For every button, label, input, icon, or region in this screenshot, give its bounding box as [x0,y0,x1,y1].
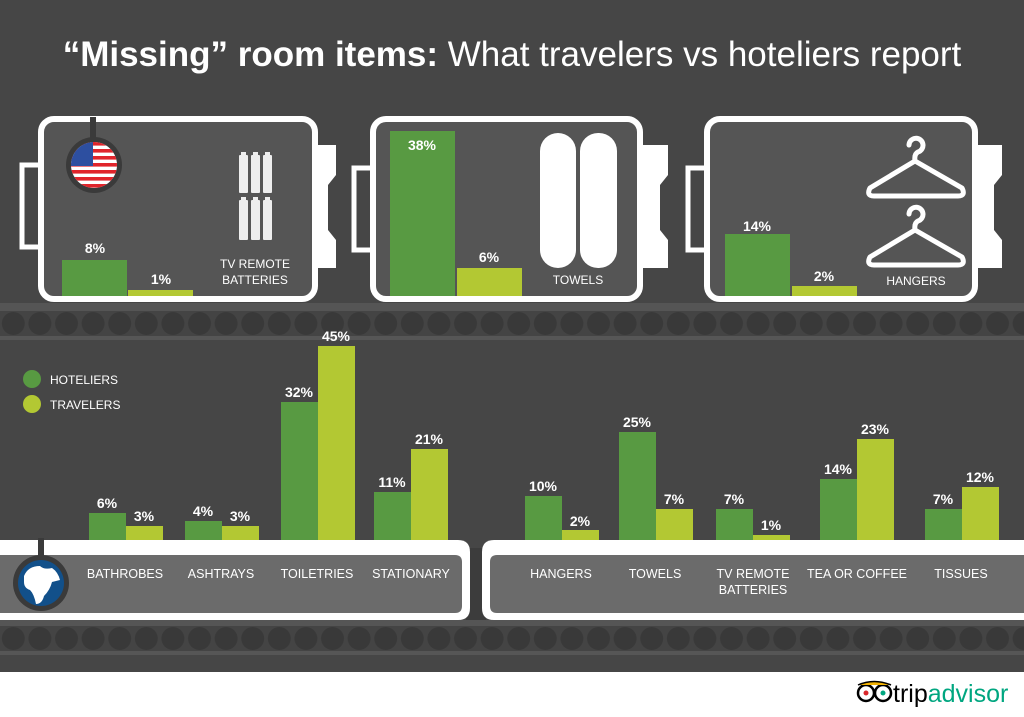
title: “Missing” room items: What travelers vs hoteliers report [63,35,962,74]
bar: travelers 6% [457,268,522,296]
category labels: BATHROBES [87,567,163,581]
panel: towels [354,119,668,299]
bar chart: global: 3% [230,508,251,524]
bar chart: global: 14% [824,461,853,477]
bottom conveyor belt [0,620,1024,655]
panel: US tv remote batteries [22,117,336,299]
bar: hoteliers 14% [725,234,790,296]
panel: hangers: HANGERS [886,274,946,288]
bar chart: global: 4% [193,503,214,519]
bar: hoteliers 38% [390,131,455,296]
bar: hoteliers 8% [62,260,127,296]
bar chart: global: 11% [378,474,406,490]
panel: US tv remote batteries: TV REMOTE [220,257,290,271]
category labels: TOILETRIES [281,567,353,581]
panel: US tv remote batteries: 8% [85,240,106,256]
bar chart: global: 7% [933,491,954,507]
bar chart: global: 25% [623,414,652,430]
category labels: HANGERS [530,567,592,581]
icon: US flag [66,117,122,193]
panel: towels: 6% [479,249,500,265]
panel: hangers [688,119,1002,299]
category labels: BATTERIES [719,583,787,597]
category labels: ASHTRAYS [188,567,254,581]
legend [23,370,120,413]
left tray [0,540,486,622]
legend: TRAVELERS [50,398,120,412]
panel: US tv remote batteries: 1% [151,271,172,287]
bar: travelers 2% [792,286,857,296]
panel: hangers: 2% [814,268,835,284]
icon: towels [540,133,617,268]
panel: hangers: 14% [743,218,772,234]
bar chart: global [89,328,999,540]
bar chart: global: 32% [285,384,314,400]
category labels: STATIONARY [372,567,451,581]
bar chart: global: 21% [415,431,444,447]
bar chart: global: 2% [570,513,591,529]
category labels: TV REMOTE [717,567,789,581]
bar: travelers 1% [128,290,193,296]
logo: tripadvisor: tripadvisor [893,680,1008,708]
icon: hangers [869,138,963,265]
panel: US tv remote batteries: BATTERIES [222,273,288,287]
category labels [87,567,988,597]
category labels: TOWELS [629,567,681,581]
legend: HOTELIERS [50,373,118,387]
bar chart: global: 7% [664,491,685,507]
bar chart: global: 1% [761,517,782,533]
top conveyor belt [0,303,1024,340]
category labels: TISSUES [934,567,988,581]
category labels: TEA OR COFFEE [807,567,907,581]
icon: batteries [239,152,272,240]
bar chart: global: 23% [861,421,890,437]
right tray [482,540,1024,620]
bar chart: global: 10% [529,478,558,494]
bar chart: global: 12% [966,469,995,485]
icon: globe [13,538,69,611]
bar chart: global: 45% [322,328,351,344]
bar chart: global: 6% [97,495,118,511]
bar chart: global: 3% [134,508,155,524]
panel: towels: 38% [408,137,437,153]
panel: towels: TOWELS [553,273,603,287]
bar chart: global: 7% [724,491,745,507]
